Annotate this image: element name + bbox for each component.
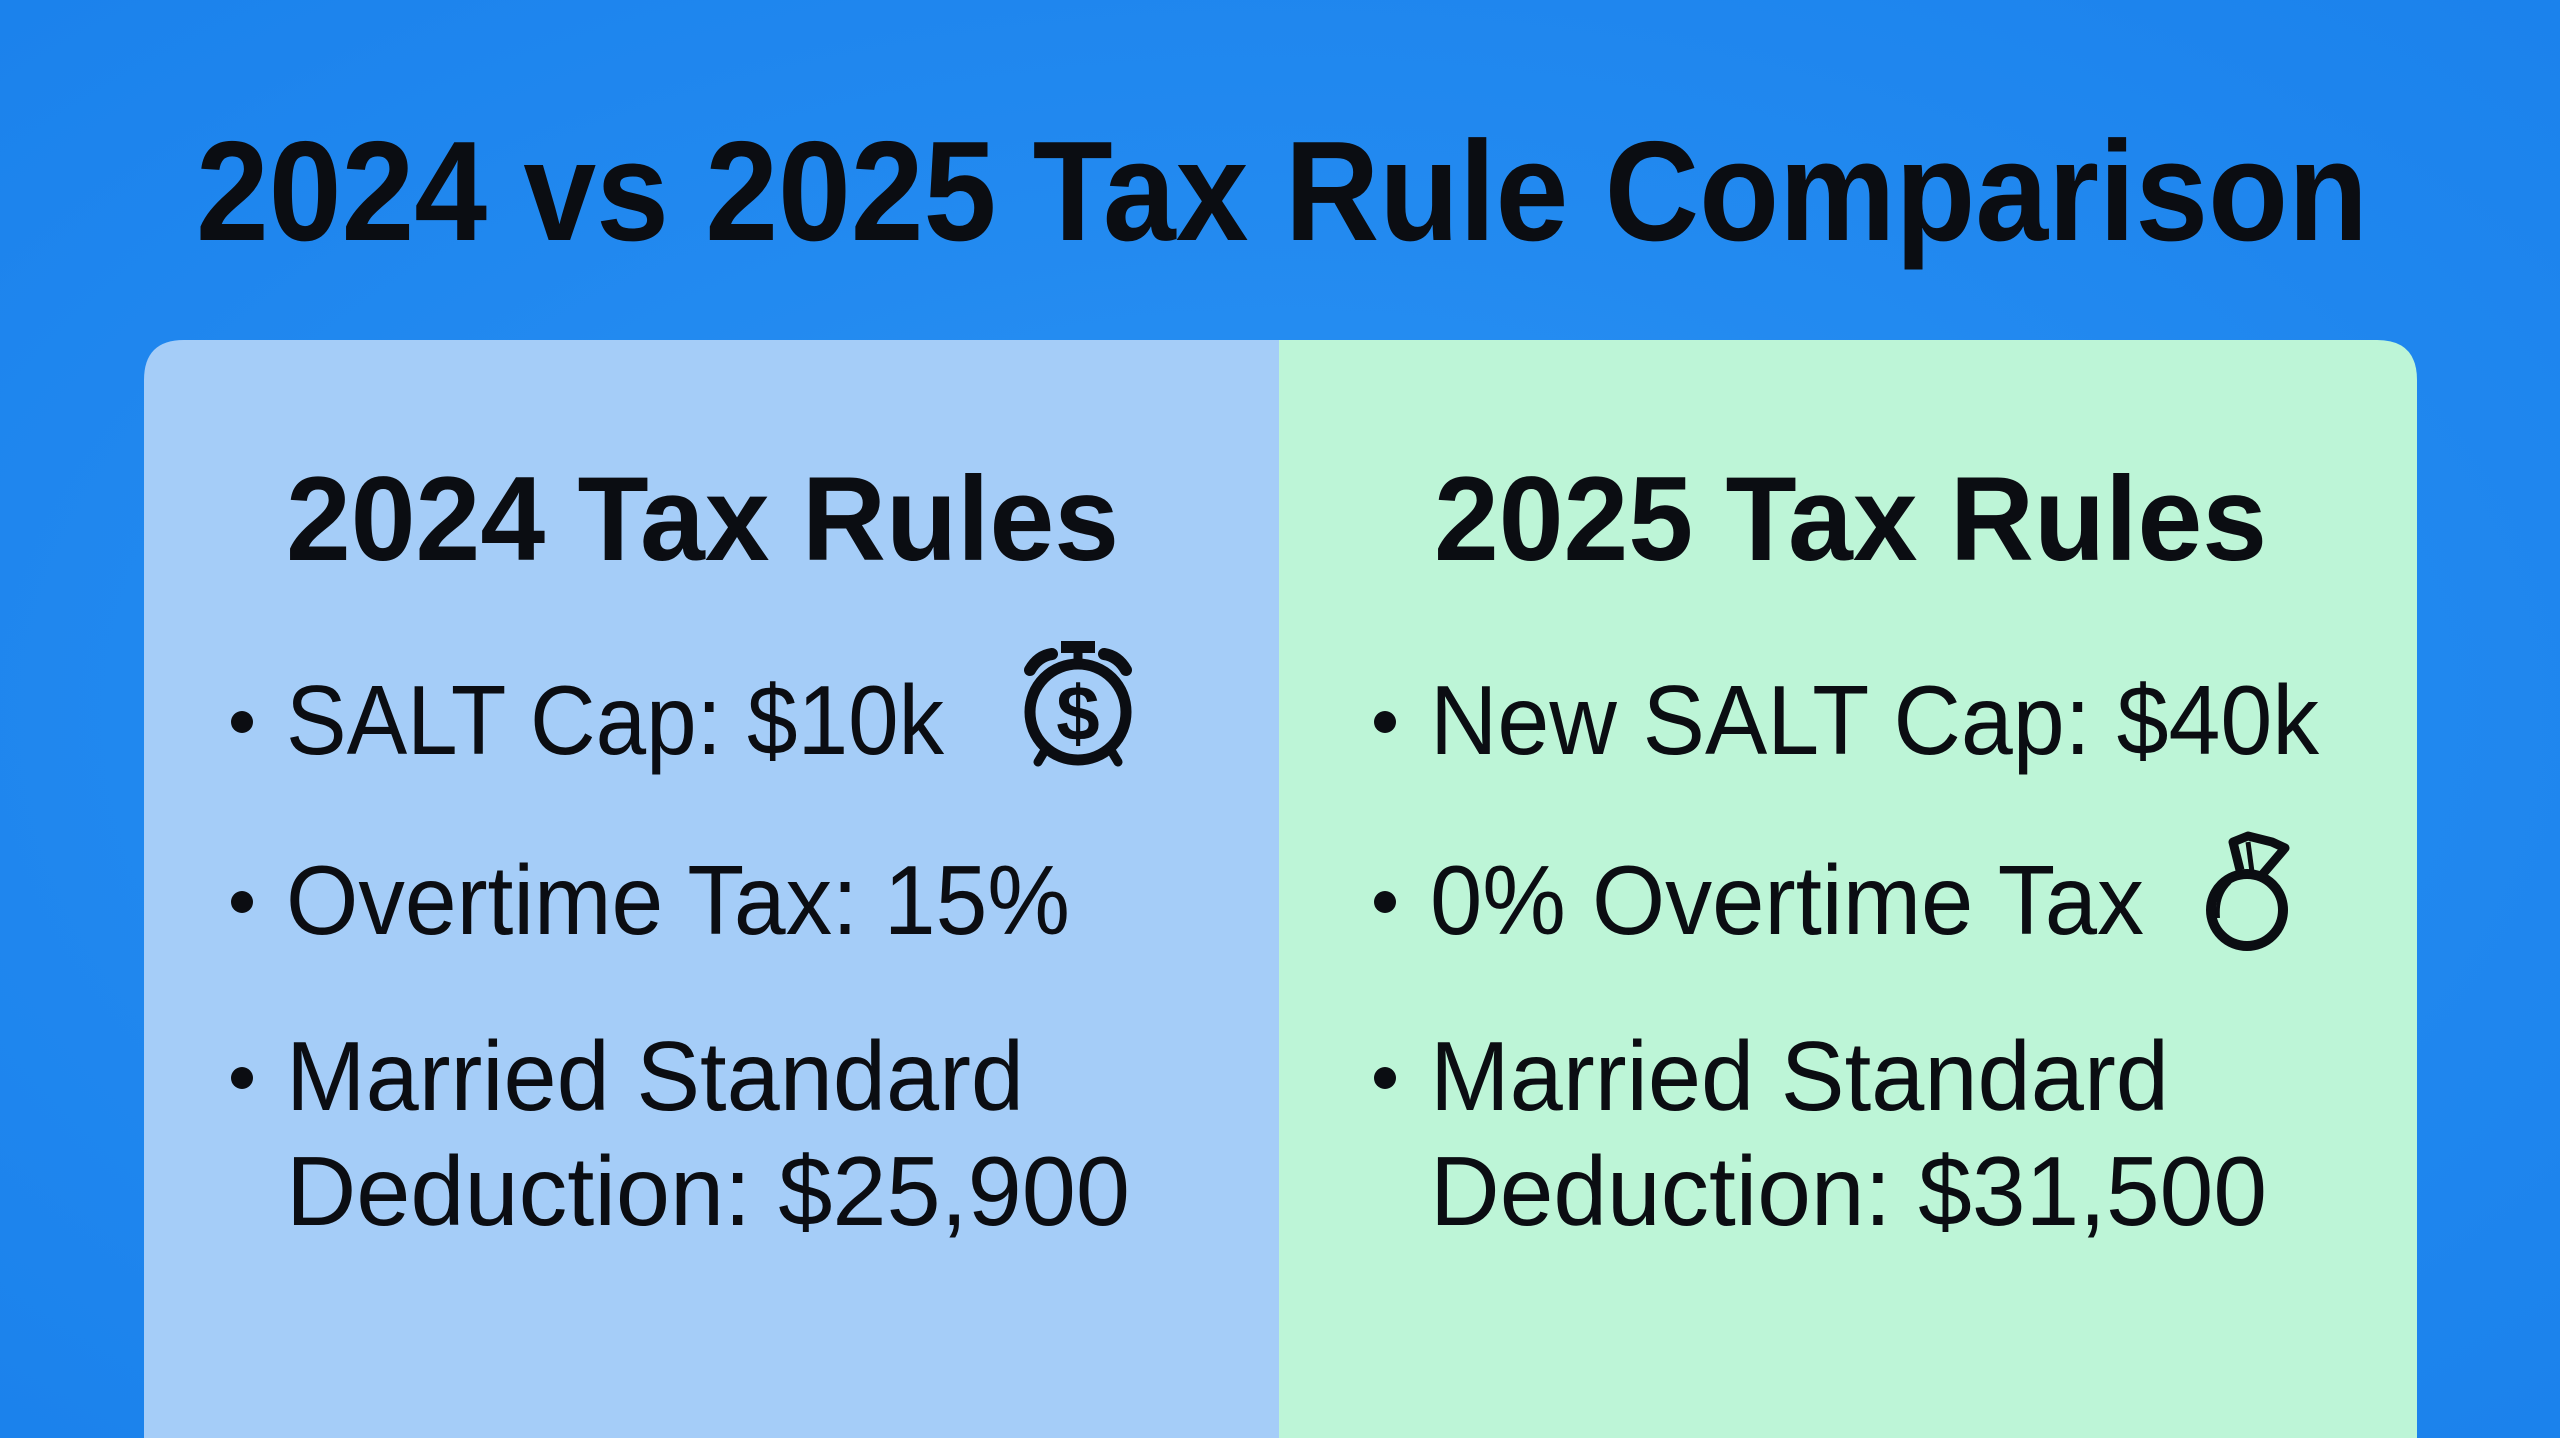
bullet: married deduction: [231, 1021, 1130, 1246]
panel: 2024 rules: [144, 340, 1279, 1438]
bullet: new SALT cap: New SALT Cap: $40k: [1430, 665, 2320, 775]
bullet: married deduction: Married Standard: [286, 1021, 1024, 1131]
bullet: SALT cap: SALT Cap: $10k: [286, 665, 945, 775]
bullet: married deduction: Deduction: $31,500: [1430, 1136, 2267, 1246]
heading: 2024 Tax Rules: 2024 Tax Rules: [286, 452, 1119, 586]
bullet: 0% overtime: 0% Overtime Tax: [1430, 845, 2144, 955]
icon: stopwatch dollar: $: [1056, 669, 1100, 757]
bullet: married deduction: Married Standard: [1430, 1021, 2169, 1131]
icon: ring: [2211, 836, 2285, 946]
bullet: overtime: Overtime Tax: 15%: [286, 845, 1070, 955]
title: 2024 vs 2025 Tax Rule Comparison: [196, 112, 2368, 271]
panel: 2025 rules: [1279, 340, 2417, 1438]
bullet: married deduction: [1374, 1021, 2267, 1246]
icon: stopwatch dollar: [1030, 643, 1126, 762]
heading: 2025 Tax Rules: 2025 Tax Rules: [1434, 452, 2267, 586]
bullet: married deduction: Deduction: $25,900: [286, 1136, 1130, 1246]
